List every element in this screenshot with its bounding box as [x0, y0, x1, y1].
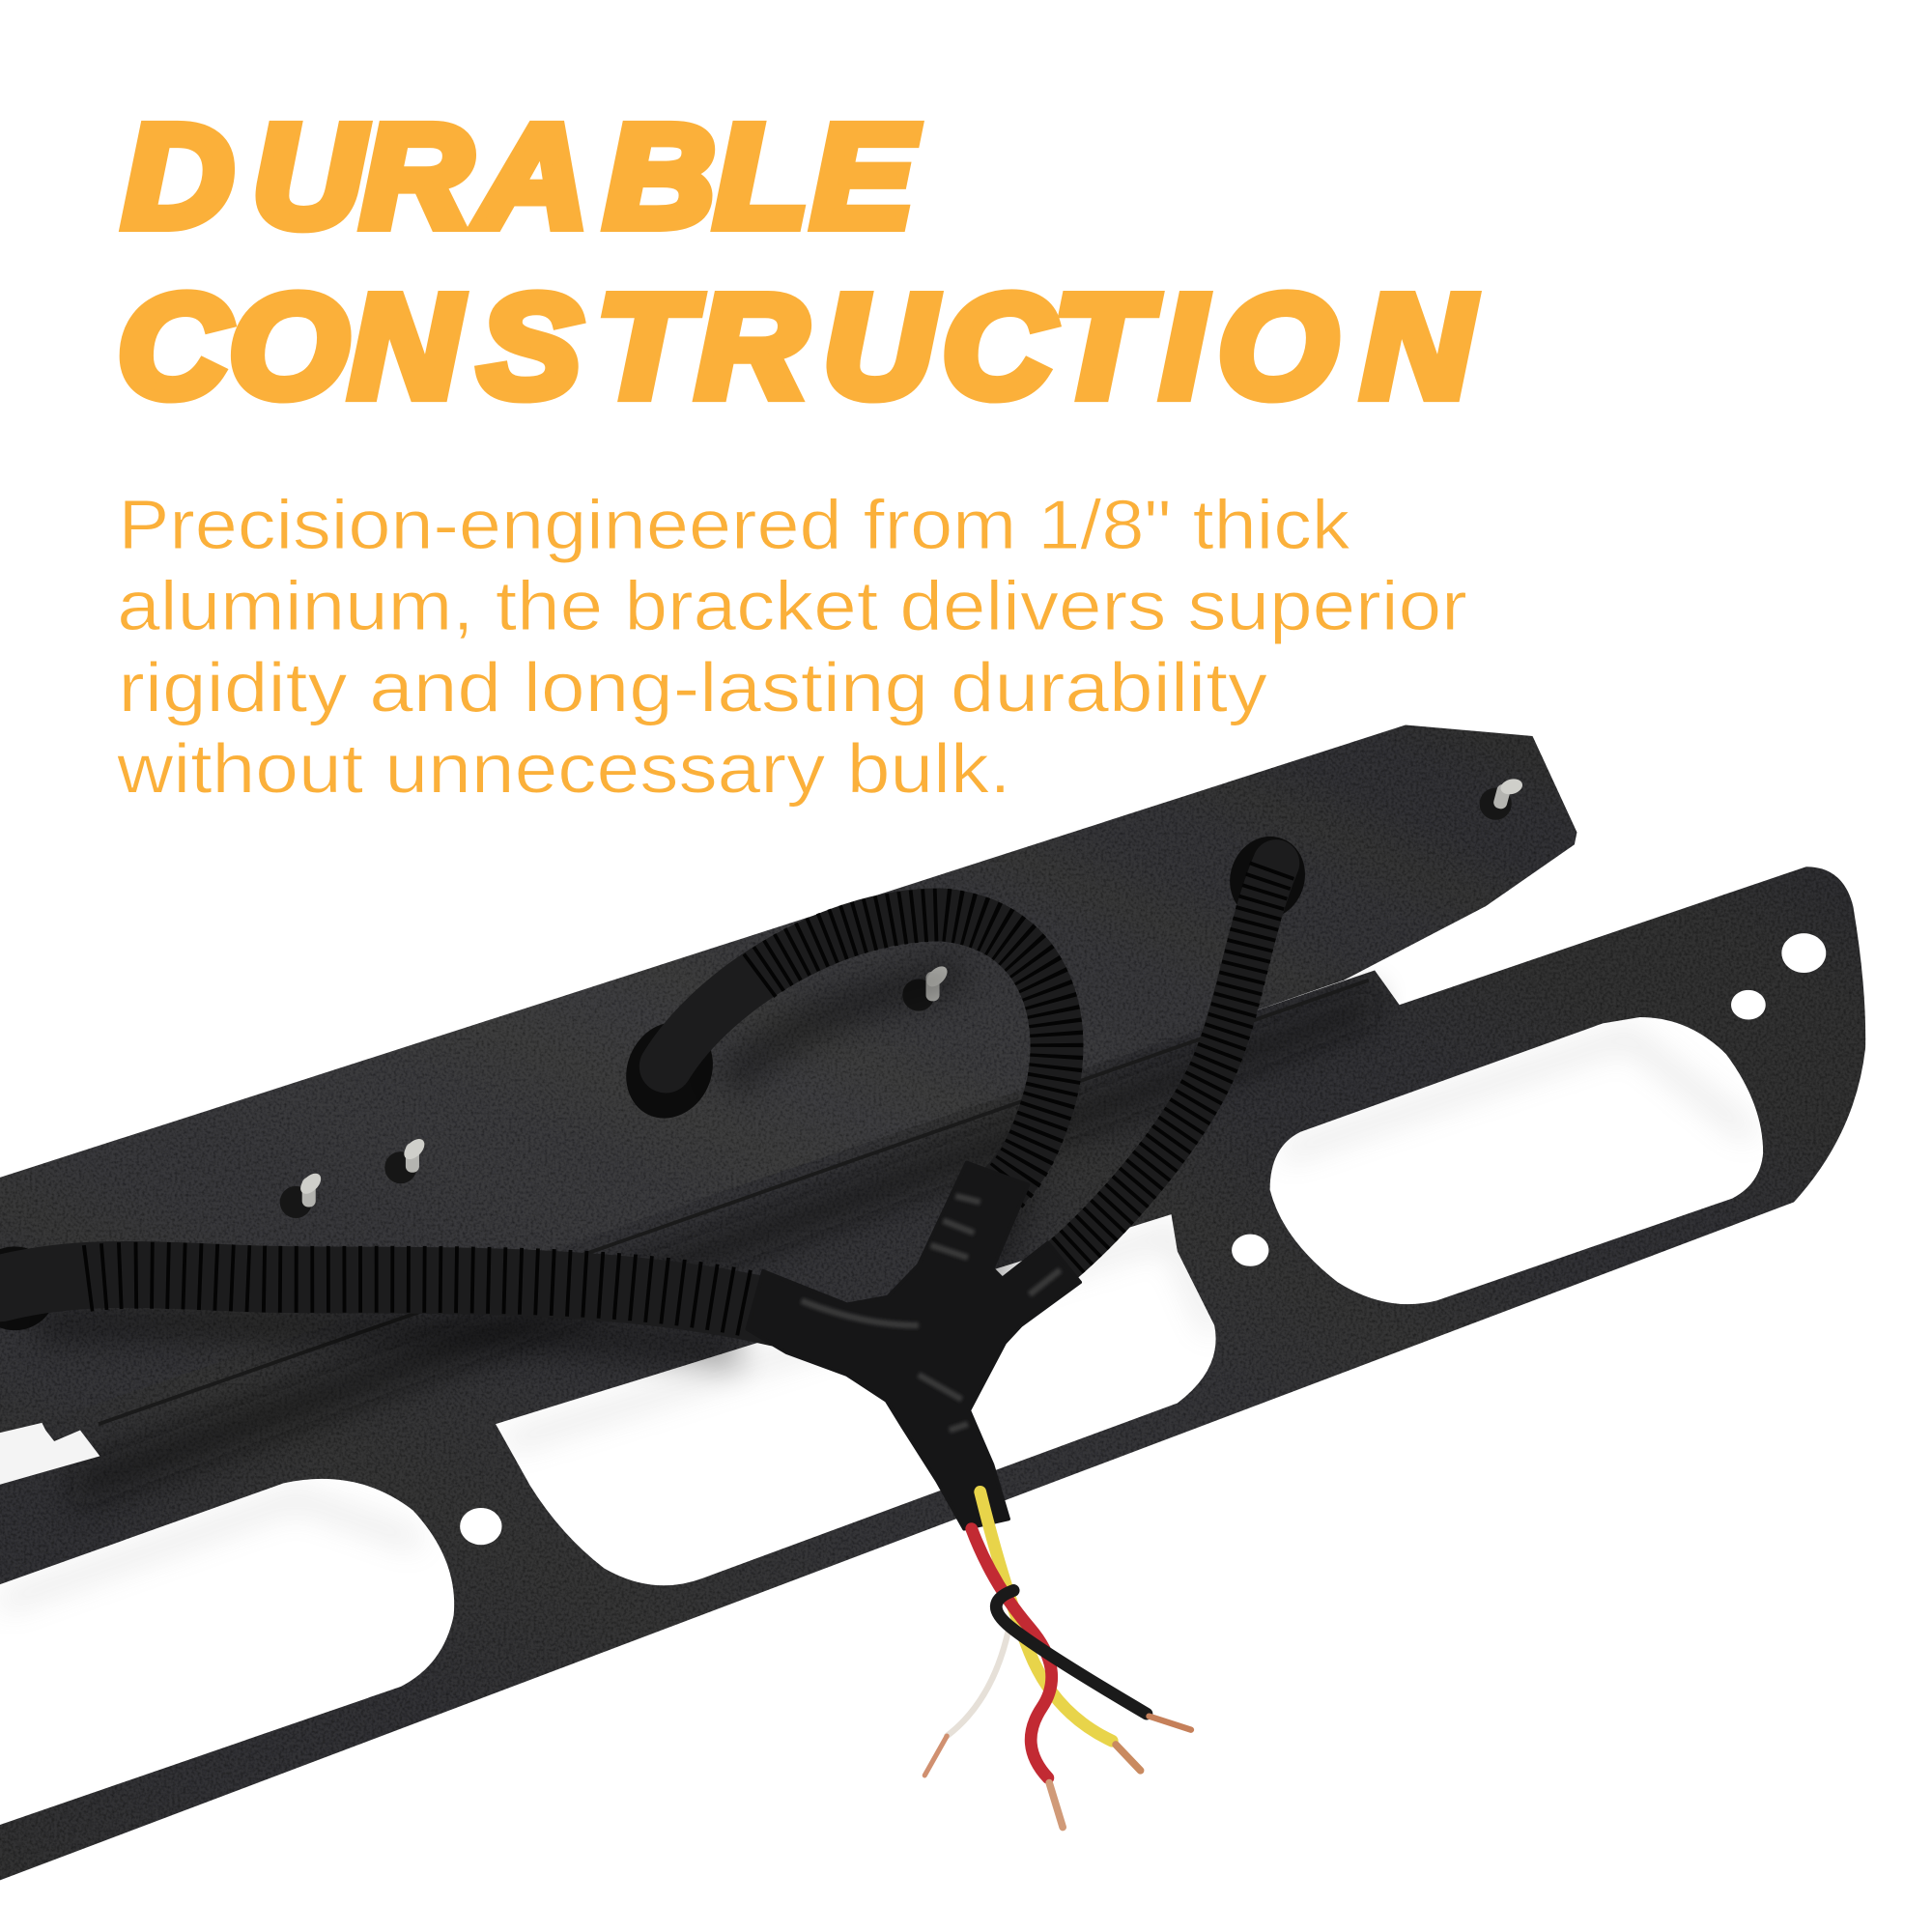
upper mounting plate	[0, 724, 1577, 1442]
description text	[116, 486, 1467, 809]
exposed wires	[924, 1492, 1191, 1828]
description line 3: rigidity and long-lasting durability	[119, 648, 1268, 726]
harness shadow on plate	[37, 974, 1023, 1350]
lower bracket plate with cut-outs	[0, 867, 1865, 1880]
harness hole left	[0, 1246, 57, 1330]
harness hole right	[1218, 826, 1317, 930]
stud 3	[384, 1135, 428, 1183]
title	[118, 95, 1476, 428]
corrugated conduit: left run	[0, 1274, 777, 1313]
taped Y junction	[747, 1163, 1080, 1529]
fold shadow	[74, 986, 1375, 1510]
photo: wiring bracket	[0, 724, 1865, 1880]
yellow wire	[980, 1492, 1141, 1771]
tape highlights	[802, 1196, 1061, 1431]
description line 2: aluminum, the bracket delivers superior	[117, 567, 1467, 645]
mounting studs	[280, 777, 1524, 1218]
white wire	[924, 1630, 1009, 1776]
harness hole centre	[611, 1008, 728, 1132]
description line 1: Precision-engineered from 1/8" thick	[119, 486, 1350, 564]
title line: durable: DURABLE	[123, 95, 918, 257]
fold edge	[99, 980, 1369, 1424]
stud 4	[280, 1170, 325, 1218]
black wire	[996, 1590, 1191, 1730]
soft shadow on background inside cut-outs	[0, 1036, 1750, 1603]
description line 4: without unnecessary bulk.	[116, 730, 1011, 809]
mounting notch	[0, 1423, 99, 1485]
stud 1	[1480, 777, 1524, 820]
red wire	[972, 1529, 1063, 1828]
corrugated conduit: centre run	[666, 915, 1057, 1214]
stud 2	[902, 962, 951, 1011]
title line: construction: CONSTRUCTION	[118, 265, 1476, 428]
corrugated conduit: right run	[1048, 863, 1276, 1272]
